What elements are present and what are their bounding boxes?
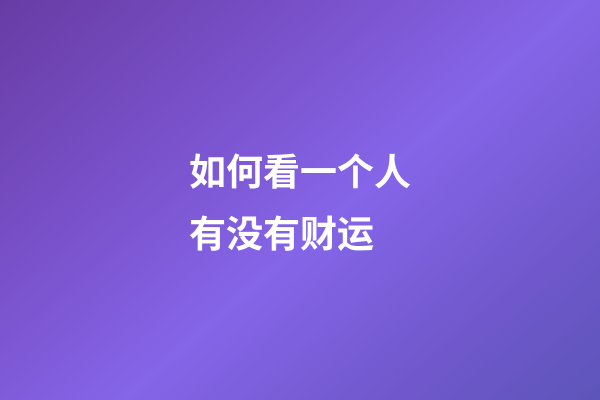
title: 有没有财运 bbox=[189, 214, 374, 255]
title: 如何看一个人 bbox=[189, 152, 411, 193]
title bbox=[189, 152, 411, 255]
